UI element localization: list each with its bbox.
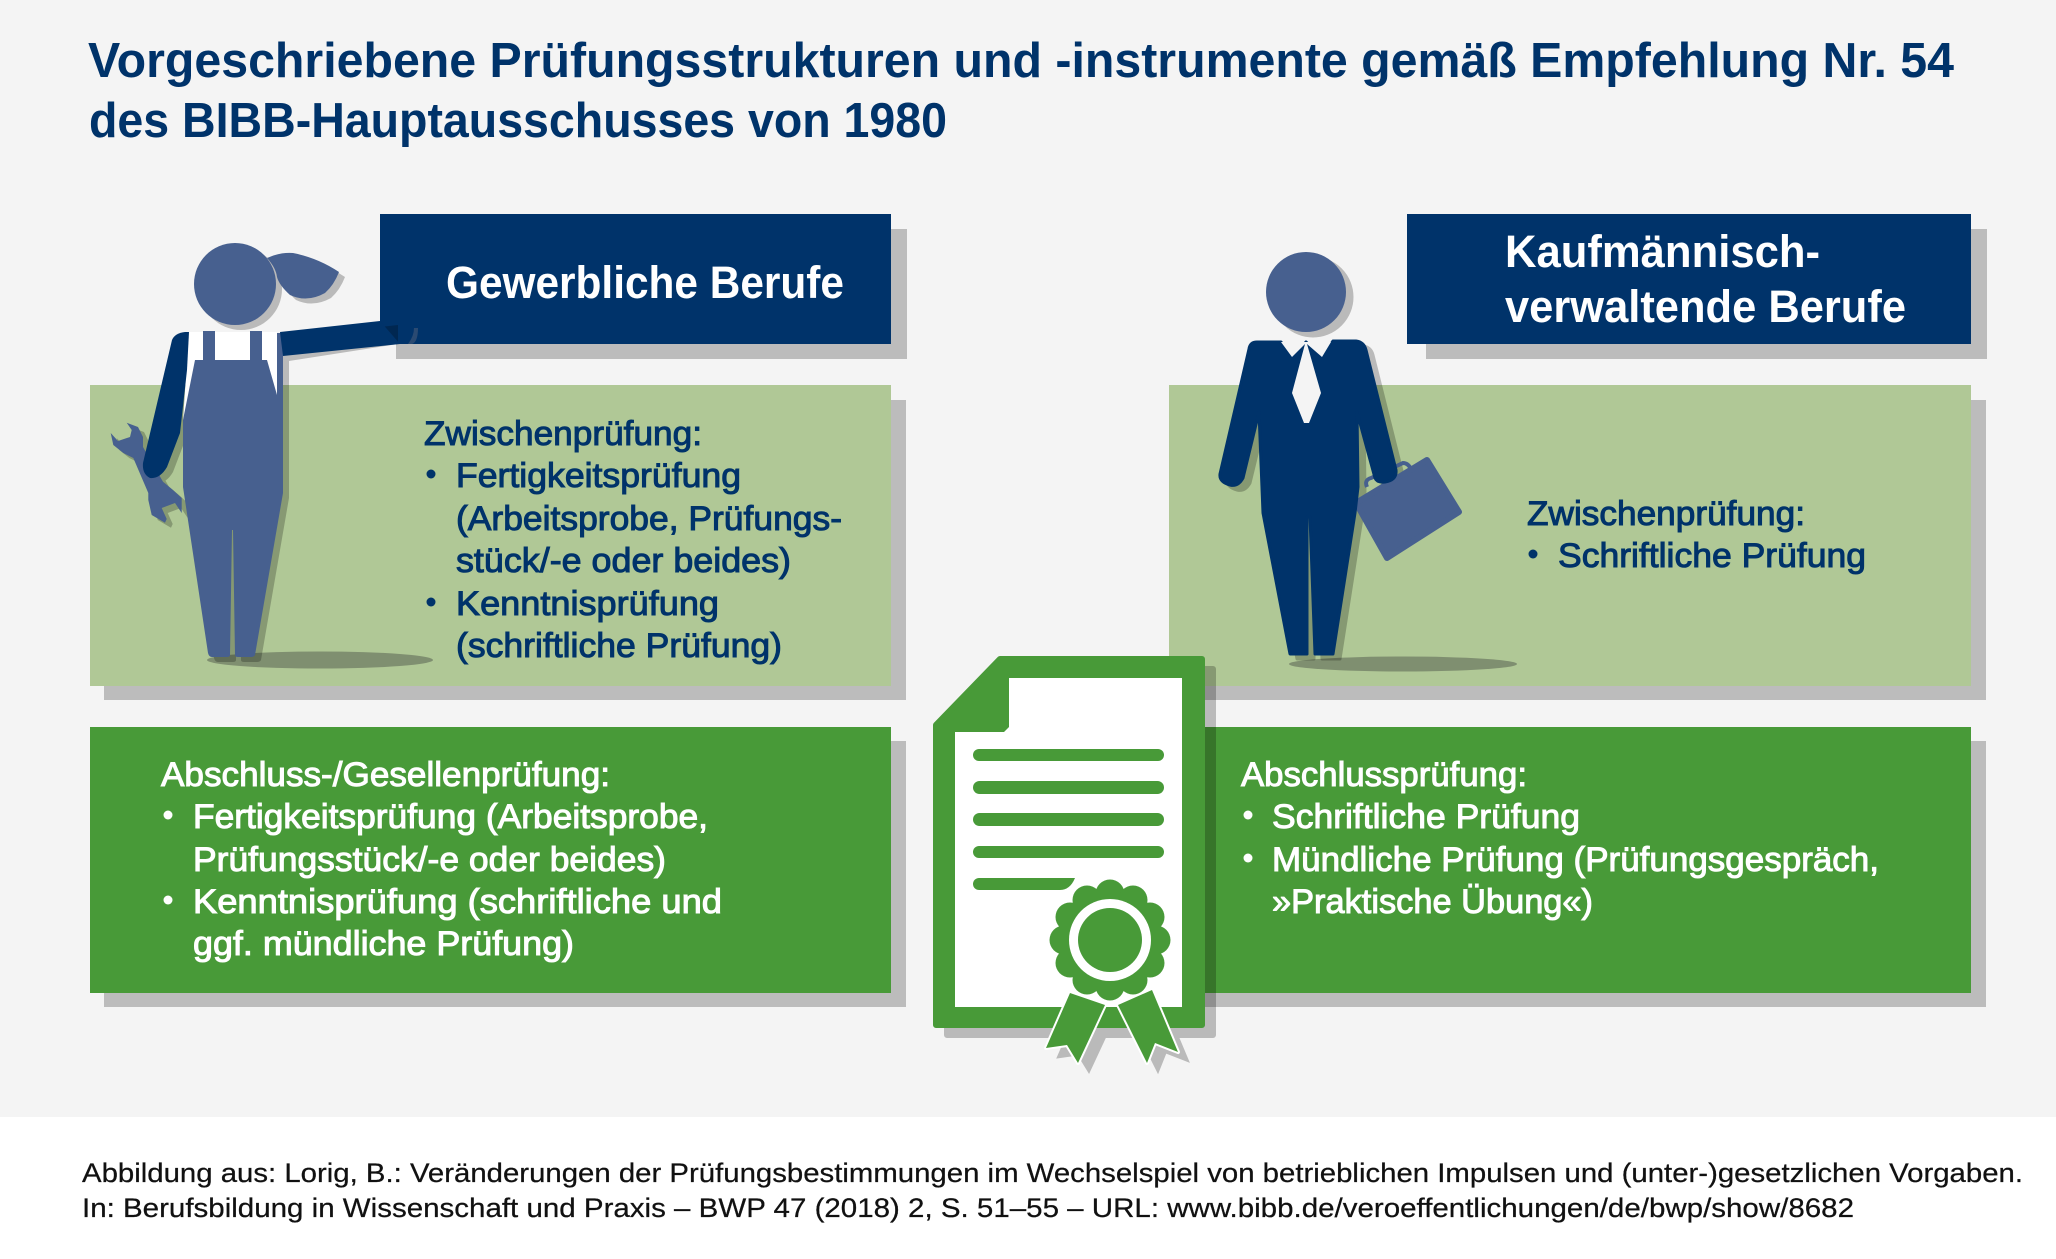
text: Zwischenprüfung kaufmännisch: Zwischenprüfung: [1527,495,1805,533]
figure shadow [1227,257,1403,659]
figure: woman with wrench [111,243,433,668]
figure shadow [117,248,398,662]
text: Zwischenprüfung gewerblich: (schriftliche Prüfung) [456,627,782,665]
heading: Kaufmännisch-verwaltende Berufe: Kaufmännisch- [1505,226,1820,277]
title [88,34,1954,148]
text: Abschluss-/Gesellenprüfung [161,756,722,963]
footer: source: Abbildung aus: Lorig, B.: Veränderungen der Prüfungsbestimmungen im Wechselspiel von betrieblichen Impulsen und (unter-)gesetzlichen Vorgaben. [82,1158,2023,1188]
text: Zwischenprüfung gewerblich: Fertigkeitsprüfung [456,457,741,495]
text: Abschlussprüfung [1241,756,1879,921]
heading: Kaufmännisch-verwaltende Berufe: verwaltende Berufe [1505,281,1906,332]
panel: Abschlussprüfung [1169,727,1986,1007]
panel: Zwischenprüfung kaufmännisch [1169,385,1986,700]
text: Abschluss-/Gesellenprüfung: Fertigkeitsprüfung (Arbeitsprobe, [193,798,708,836]
ground shadow [207,652,433,668]
ground shadow [1289,656,1517,672]
text: Abschlussprüfung: Schriftliche Prüfung [1272,798,1580,836]
certificate shadow [947,669,1213,1073]
hand [408,328,418,344]
text: Zwischenprüfung gewerblich: Zwischenprüfung: [424,415,702,453]
heading: Gewerbliche Berufe: Gewerbliche Berufe [446,257,844,308]
text: Abschluss-/Gesellenprüfung: Prüfungsstück/-e oder beides) [193,841,666,879]
text: Zwischenprüfung kaufmännisch [1527,495,1866,575]
overalls [183,331,283,657]
heading: Gewerbliche Berufe [380,214,907,359]
heading: Kaufmännisch-verwaltende Berufe [1407,214,1987,359]
title: des BIBB-Hauptausschusses von 1980 [89,94,947,148]
text: Abschlussprüfung: »Praktische Übung«) [1272,883,1593,921]
panel: Zwischenprüfung gewerblich [90,385,906,700]
footer: source: In: Berufsbildung in Wissenschaft und Praxis – BWP 47 (2018) 2, S. 51–55 – URL: www.bibb.de/veroeffentlichungen/de/bwp/show/8682 [82,1193,1854,1223]
pointing arm [280,321,400,356]
text: Abschluss-/Gesellenprüfung: ggf. mündliche Prüfung) [193,925,574,963]
text: Abschlussprüfung: Abschlussprüfung: [1241,756,1527,794]
rosette [1050,880,1170,1000]
ponytail [267,253,339,299]
panel: Abschluss-/Gesellenprüfung [90,727,906,1007]
text: Zwischenprüfung kaufmännisch: Schriftliche Prüfung [1558,537,1866,575]
footer: source [82,1158,2023,1223]
icon: certificate [936,659,1213,1073]
suit [1220,341,1396,654]
text: Abschlussprüfung: Mündliche Prüfung (Prüfungsgespräch, [1272,841,1879,879]
text: Zwischenprüfung gewerblich: stück/-e oder beides) [456,542,791,580]
text: Abschluss-/Gesellenprüfung: Kenntnisprüfung (schriftliche und [193,883,722,921]
text: Zwischenprüfung gewerblich: (Arbeitsprobe, Prüfungs- [456,500,842,538]
head [194,243,276,325]
ribbons [1046,990,1178,1063]
figure: man with briefcase [1220,252,1517,672]
head [1266,252,1346,332]
text: Zwischenprüfung gewerblich [424,415,842,665]
icon: briefcase [1356,460,1459,558]
title: Vorgeschriebene Prüfungsstrukturen und -instrumente gemäß Empfehlung Nr. 54 [88,34,1954,88]
shirt [183,332,283,420]
collar and tie [1281,342,1331,423]
left arm [143,332,189,478]
text: Zwischenprüfung gewerblich: Kenntnisprüfung [456,585,719,623]
document [936,659,1202,1025]
text: Abschluss-/Gesellenprüfung: Abschluss-/Gesellenprüfung: [161,756,610,794]
text lines [973,749,1164,890]
icon: wrench [111,423,182,523]
